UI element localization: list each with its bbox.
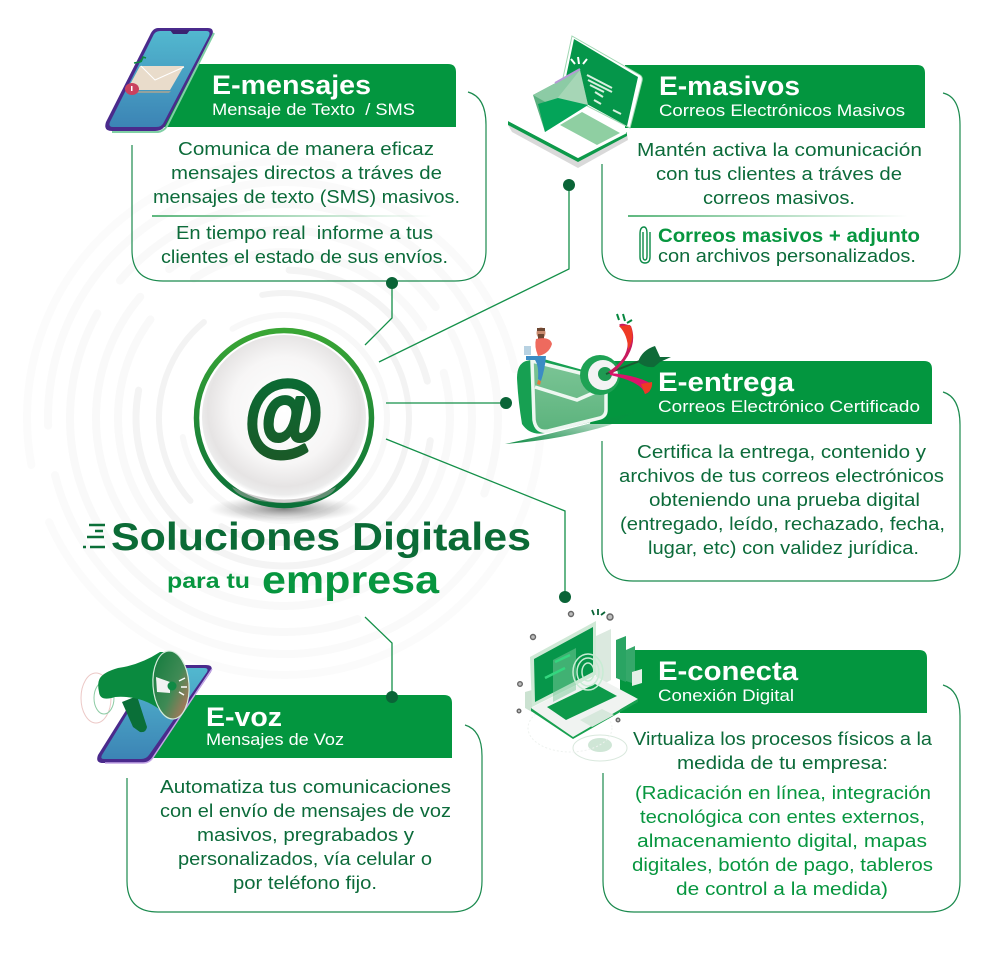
icon: laptop with fingerprint <box>517 609 642 761</box>
icon: paperclip <box>640 227 650 263</box>
text block <box>160 777 451 893</box>
title: Soluciones Digitales <box>111 516 531 559</box>
heading: E-masivos <box>659 71 800 101</box>
title: para tu <box>167 570 250 593</box>
heading: E-entrega <box>658 367 795 397</box>
banner <box>625 65 925 128</box>
panel: E-masivos: Correos Electrónicos Masivos <box>659 101 905 120</box>
banner <box>140 695 452 758</box>
text block <box>152 139 460 267</box>
connector dot <box>559 591 571 603</box>
panel: E-conecta: Conexión Digital <box>658 686 794 705</box>
panel: E-conecta <box>517 591 960 912</box>
text block: En tiempo real informe a tus <box>176 223 433 243</box>
banner <box>620 650 927 713</box>
text block: almacenamiento digital, mapas <box>637 831 927 851</box>
text block: digitales, botón de pago, tableros <box>632 855 933 875</box>
connector dot <box>563 179 575 191</box>
card outline <box>132 92 486 281</box>
panel: E-mensajes <box>105 28 486 289</box>
connector dot <box>386 691 398 703</box>
panel: E-mensajes: Mensaje de Texto / SMS <box>212 100 415 119</box>
banner <box>125 64 456 127</box>
text block: con archivos personalizados. <box>658 246 916 266</box>
heading: E-voz <box>206 702 282 732</box>
banner <box>590 361 932 424</box>
text block: (Radicación en línea, integración <box>635 783 931 803</box>
text block: lugar, etc) con validez jurídica. <box>648 538 919 558</box>
text block: mensajes directos a tráves de <box>171 163 442 183</box>
text block: medida de tu empresa: <box>677 753 888 773</box>
text block: clientes el estado de sus envíos. <box>161 247 448 267</box>
title <box>83 516 531 602</box>
text block: por teléfono fijo. <box>233 873 377 893</box>
icon: laptop with envelope <box>508 36 642 168</box>
icon: megaphone on phone <box>81 650 212 763</box>
title: empresa <box>262 559 439 602</box>
panel: E-entrega <box>500 314 960 581</box>
text block: Virtualiza los procesos físicos a la <box>633 729 933 749</box>
at sign: @ <box>244 364 324 464</box>
text block: de control a la medida) <box>676 879 888 899</box>
icon: phone with envelope <box>105 28 214 132</box>
text block: personalizados, vía celular o <box>178 849 432 869</box>
icon: speed lines <box>83 525 105 547</box>
panel: E-voz: Mensajes de Voz <box>206 730 344 749</box>
panel: E-entrega: Correos Electrónico Certificado <box>658 397 920 416</box>
card outline <box>603 685 960 912</box>
text block <box>619 442 945 558</box>
background concentric rings <box>0 96 606 740</box>
central @ ball <box>196 330 372 522</box>
connector dot <box>500 397 512 409</box>
card outline <box>127 725 482 912</box>
card outline <box>602 392 960 581</box>
heading: E-mensajes <box>212 70 371 100</box>
text block: Mantén activa la comunicación <box>637 140 922 160</box>
dart <box>606 346 671 374</box>
text block: Certifica la entrega, contenido y <box>637 442 926 462</box>
connector dot <box>386 277 398 289</box>
ribbons <box>608 314 652 394</box>
text block: con el envío de mensajes de voz <box>160 801 451 821</box>
text block: Automatiza tus comunicaciones <box>160 777 451 797</box>
text block: Comunica de manera eficaz <box>178 139 434 159</box>
text block <box>632 729 933 899</box>
person <box>524 328 552 385</box>
icon: envelope with target and dart <box>505 314 671 444</box>
panel: E-voz <box>81 650 482 912</box>
text block: mensajes de texto (SMS) masivos. <box>153 187 460 207</box>
text block: correos masivos. <box>703 188 855 208</box>
text block: obteniendo una prueba digital <box>649 490 920 510</box>
text block: tecnológica con entes externos, <box>640 807 925 827</box>
text block: con tus clientes a tráves de <box>656 164 902 184</box>
text block: masivos, pregrabados y <box>197 825 414 845</box>
text block <box>628 140 922 266</box>
heading: E-conecta <box>658 656 799 686</box>
text block: Correos masivos + adjunto <box>658 225 920 247</box>
card outline <box>602 93 960 281</box>
connector lines <box>365 185 569 697</box>
text block: (entregado, leído, rechazado, fecha, <box>620 514 945 534</box>
panel: E-masivos <box>508 36 960 281</box>
text block: archivos de tus correos electrónicos <box>619 466 944 486</box>
